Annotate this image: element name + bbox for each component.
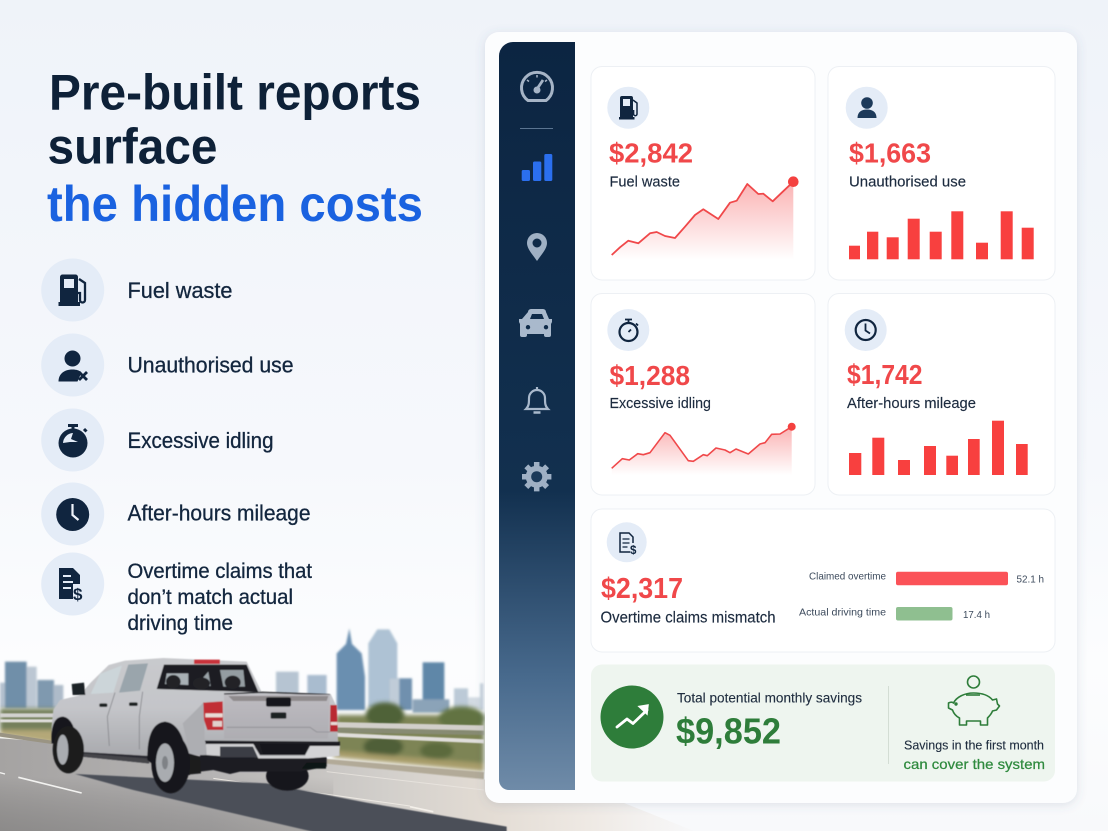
wheel arches (51, 717, 77, 747)
icon: clock (845, 309, 887, 351)
road markings (18, 777, 82, 793)
cost list (41, 258, 312, 635)
card: overtime claims mismatch: $2,317 (601, 573, 683, 605)
icon: trend arrow (600, 686, 664, 748)
icon: fuel pump (607, 87, 649, 129)
icon: invoice: $ (630, 545, 637, 557)
brake light (194, 660, 220, 664)
panel: total savings: can cover the system (904, 756, 1045, 772)
icon: piggy bank (948, 676, 1000, 725)
rear wheel (151, 733, 190, 793)
card: unauthorised use: $1,663 (849, 138, 931, 169)
truck shadow (75, 774, 507, 831)
item: overtime claims: driving time (128, 612, 233, 635)
icon: car (519, 309, 552, 337)
icon: gauge (522, 72, 552, 100)
card: overtime claims mismatch (591, 509, 1055, 652)
body (52, 658, 340, 757)
icon: person (846, 87, 888, 129)
door seams and handles (107, 692, 143, 749)
chart: unauthorised use bars (849, 211, 1034, 259)
panel: total savings: Total potential monthly savings (677, 690, 862, 705)
vegetation (0, 702, 485, 772)
rear quarter highlight (183, 702, 205, 755)
mirror (72, 683, 85, 695)
title: surface (48, 118, 218, 174)
item: after-hours mileage (41, 482, 310, 546)
road surface (0, 738, 700, 831)
title: the hidden costs (47, 176, 423, 232)
card: excessive idling: $1,288 (610, 360, 690, 391)
card: unauthorised use: Unauthorised use (849, 174, 966, 191)
pickup truck (51, 658, 340, 793)
bar: actual driving time: 17.4 h (963, 609, 990, 621)
card: after-hours mileage: After-hours mileage (847, 395, 976, 412)
panel: total savings: Savings in the first month (904, 738, 1044, 752)
guard rails (0, 713, 484, 743)
photo: highway scene with skyline (0, 628, 700, 831)
card: fuel waste: $2,842 (609, 138, 693, 169)
front wheel (53, 726, 84, 773)
card: unauthorised use (828, 66, 1055, 280)
mud flap (183, 752, 201, 775)
item: unauthorised use: Unauthorised use (128, 353, 294, 378)
card: excessive idling (591, 294, 815, 495)
card: after-hours mileage: $1,742 (847, 359, 922, 390)
icon: bell (526, 387, 548, 412)
bumper (205, 741, 340, 755)
item: overtime claims: don’t match actual (128, 586, 293, 609)
panel: total savings: $9,852 (676, 710, 781, 752)
title (47, 64, 423, 232)
tail lights (203, 701, 223, 730)
chart: idling trend (612, 423, 796, 475)
chart: fuel waste trend (612, 176, 799, 260)
icon: gear (522, 462, 551, 491)
sidebar (499, 42, 575, 790)
item: overtime claims: $ (73, 585, 83, 604)
bar: claimed overtime (809, 570, 1044, 586)
bar: actual driving time (799, 606, 990, 621)
item: overtime claims: Overtime claims that (128, 560, 312, 583)
skyline (0, 628, 483, 713)
card: after-hours mileage (828, 294, 1055, 495)
item: fuel waste (41, 258, 232, 322)
windows (91, 665, 122, 694)
item: excessive idling: Excessive idling (128, 428, 274, 453)
card: fuel waste: Fuel waste (610, 174, 680, 191)
item: overtime claims (41, 552, 312, 635)
icon: bars (active) (522, 154, 552, 181)
card: overtime claims mismatch: Overtime claims mismatch (600, 610, 776, 627)
title: Pre-built reports (49, 64, 421, 120)
icon: map pin (527, 233, 547, 261)
bar: claimed overtime: Claimed overtime (809, 570, 886, 582)
item: excessive idling (41, 408, 274, 472)
item: unauthorised use (41, 334, 294, 396)
tailgate (224, 695, 330, 739)
bar: actual driving time: Actual driving time (799, 606, 886, 618)
panel: total savings (591, 664, 1055, 782)
far rear wheel (266, 761, 309, 791)
chart: after-hours bars (849, 421, 1028, 475)
card: fuel waste (591, 66, 815, 280)
dashboard panel (485, 32, 1077, 803)
card: excessive idling: Excessive idling (610, 395, 711, 412)
icon: stopwatch (607, 309, 649, 351)
item: after-hours mileage: After-hours mileage (128, 501, 310, 526)
bar: claimed overtime: 52.1 h (1016, 574, 1044, 586)
item: fuel waste: Fuel waste (128, 278, 232, 303)
icon: invoice (607, 522, 647, 562)
